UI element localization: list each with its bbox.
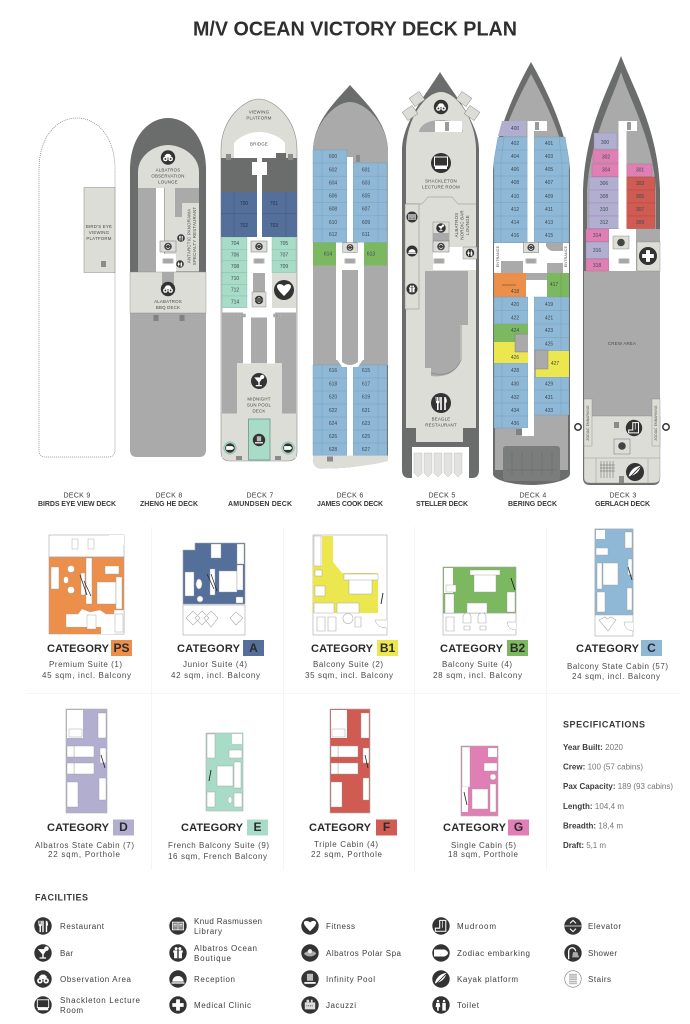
deck 6 plan: 617 xyxy=(362,382,370,388)
category C midship cabins xyxy=(494,297,569,428)
category B2: B2 xyxy=(510,641,525,655)
deck 4 plan: 434 xyxy=(511,408,519,414)
deck 4 plan: 425 xyxy=(545,342,553,348)
legend: toilet xyxy=(432,996,480,1014)
legend: library xyxy=(169,917,262,936)
deck 5 plan xyxy=(402,72,480,478)
legend: library: Library xyxy=(194,927,222,936)
deck labels: BIRDS EYE VIEW DECK xyxy=(38,501,116,508)
deck 4 plan: 419 xyxy=(545,302,553,308)
deck 8 plan xyxy=(130,118,206,457)
category E: E xyxy=(253,820,262,834)
deck 4 plan: 403 xyxy=(545,154,553,160)
category D cabin 400 xyxy=(498,121,526,136)
category A: CATEGORY xyxy=(177,643,241,655)
deck 6 plan: 611 xyxy=(362,232,370,238)
deck 9 plan xyxy=(39,118,115,457)
deck labels: DECK 9 xyxy=(63,492,91,500)
deck labels: ZHENG HE DECK xyxy=(140,501,198,508)
category A: 42 sqm, incl. Balcony xyxy=(171,671,260,680)
category E: French Balcony Suite (9) xyxy=(168,841,269,850)
specifications: Crew: 100 (57 cabins) xyxy=(563,762,643,772)
deck 8 plan: OBSERVATION xyxy=(151,174,185,178)
category A cabins: 701 xyxy=(270,201,278,207)
deck 4 plan xyxy=(493,62,570,485)
deck labels: AMUNDSEN DECK xyxy=(228,501,292,508)
deck 7 plan: 710 xyxy=(231,276,239,282)
icon: observation lounge xyxy=(161,150,175,165)
category PS: Premium Suite (1) xyxy=(49,660,122,669)
deck 7 plan: 708 xyxy=(231,264,239,270)
deck 6 plan: 612 xyxy=(329,232,337,238)
deck 6 plan: 604 xyxy=(329,180,337,186)
category C: 24 sqm, incl. Balcony xyxy=(572,672,660,681)
deck 3 plan: 312 xyxy=(600,220,608,226)
legend: medical clinic: Medical Clinic xyxy=(194,1001,251,1010)
deck 5 plan: NORDIC BAR xyxy=(460,210,464,240)
deck 4 plan: 405 xyxy=(545,167,553,173)
category PS xyxy=(42,535,132,680)
legend: medical clinic xyxy=(169,996,251,1014)
icon: infinity pool xyxy=(253,434,265,446)
deck 4 plan: 401 xyxy=(545,141,553,147)
specifications xyxy=(563,720,673,850)
floor plan E xyxy=(206,733,243,811)
deck 5 plan: ALBATROS xyxy=(454,213,459,237)
deck 5 plan: LOUNGE xyxy=(465,215,470,235)
category C xyxy=(567,529,668,681)
category A xyxy=(171,543,264,680)
deck 6 plan: 602 xyxy=(329,168,337,174)
category D cabins xyxy=(586,133,619,258)
legend: polar spa: Albatros Polar Spa xyxy=(326,949,402,958)
deck 3 plan xyxy=(575,56,669,485)
category G: G xyxy=(514,820,523,834)
legend: jacuzzi xyxy=(301,996,356,1014)
category A cabins xyxy=(221,192,297,237)
category C: C xyxy=(647,641,656,655)
legend: elevator xyxy=(564,917,621,935)
category F: F xyxy=(383,820,390,834)
deck 8 plan: LOUNGE xyxy=(158,180,178,184)
deck 7 plan: MIDNIGHT xyxy=(247,396,271,402)
deck 4 plan: 407 xyxy=(545,180,553,186)
deck 6 plan: 628 xyxy=(329,447,337,453)
facilities heading: FACILITIES xyxy=(35,892,88,902)
deck 4 plan: ENTRANCE xyxy=(496,245,500,267)
category B1: CATEGORY xyxy=(311,643,374,655)
deck 3 plan: 309 xyxy=(636,220,644,226)
legend: infinity pool: Infinity Pool xyxy=(326,975,375,984)
deck labels: DECK 8 xyxy=(155,492,183,500)
legend: jacuzzi: Jacuzzi xyxy=(326,1001,356,1010)
facilities legend xyxy=(34,892,621,1015)
icon: fitness xyxy=(274,280,294,300)
deck 5 plan: LECTURE ROOM xyxy=(422,184,460,190)
legend: elevator: Elevator xyxy=(588,922,621,931)
category B1: 35 sqm, incl. Balcony xyxy=(305,671,393,680)
deck 6 plan: 625 xyxy=(362,434,370,440)
deck 6 plan: 606 xyxy=(329,194,337,200)
deck 6 plan xyxy=(313,85,388,469)
deck 7 plan: 712 xyxy=(231,288,239,294)
deck 4 plan: 410 xyxy=(511,194,519,200)
category B2 cabin 417: 417 xyxy=(550,282,558,288)
deck 4 plan: 415 xyxy=(545,233,553,239)
deck 6 plan: 623 xyxy=(362,421,370,427)
legend: stairs: Stairs xyxy=(588,975,611,984)
deck 8 plan: ALBATROS xyxy=(156,168,180,172)
deck 3 plan: 306 xyxy=(600,181,608,187)
legend: boutique: Albatros Ocean xyxy=(194,944,257,953)
category C: CATEGORY xyxy=(576,643,640,655)
legend: mudroom: Mudroom xyxy=(457,922,496,931)
deck 3 plan: ZODIAC EMBARKING xyxy=(586,405,590,441)
legend: reception xyxy=(169,970,235,988)
category PS: 45 sqm, incl. Balcony xyxy=(42,671,131,680)
category B1: B1 xyxy=(380,641,395,655)
deck 5 plan: SHACKLETON xyxy=(425,178,457,184)
deck 6 plan: 621 xyxy=(362,408,370,414)
deck 4 plan: 423 xyxy=(545,328,553,334)
legend: polar spa xyxy=(301,944,402,962)
category B2: CATEGORY xyxy=(440,643,504,655)
category PS: CATEGORY xyxy=(47,643,110,655)
category A cabins: 702 xyxy=(240,223,248,229)
floor plan D xyxy=(66,709,107,813)
deck 6 plan: 619 xyxy=(362,394,370,400)
deck 4 plan: 436 xyxy=(511,421,519,427)
specifications: Pax Capacity: 189 (93 cabins) xyxy=(563,782,673,791)
category F cabins xyxy=(624,177,655,228)
deck 8 plan: BBQ DECK xyxy=(156,305,180,310)
legend: kayak platform: Kayak platform xyxy=(457,975,518,984)
category E xyxy=(168,733,269,861)
category PS cabin 418: 418 xyxy=(511,289,519,295)
icon: reception xyxy=(406,246,418,256)
deck 7 plan xyxy=(221,99,297,461)
deck 4 plan: 412 xyxy=(511,207,519,213)
deck labels: DECK 6 xyxy=(336,492,364,500)
deck 3 plan: 303 xyxy=(636,181,644,187)
category F: CATEGORY xyxy=(309,822,372,834)
legend: reception: Reception xyxy=(194,975,235,984)
deck 3 plan: 305 xyxy=(636,194,644,200)
deck 7 plan: BRIDGE xyxy=(250,142,268,146)
icon: lecture room xyxy=(431,153,451,173)
deck 7 plan: DECK xyxy=(252,408,266,414)
deck 6 plan: 626 xyxy=(329,434,337,440)
floor plan G xyxy=(461,746,498,816)
deck labels: DECK 3 xyxy=(609,492,637,500)
category D xyxy=(35,709,134,859)
deck 4 plan: 431 xyxy=(545,395,553,401)
legend: restaurant: Restaurant xyxy=(60,922,105,931)
category B2 cabins: 613 xyxy=(367,252,375,258)
deck 4 plan: 406 xyxy=(511,167,519,173)
legend: restaurant xyxy=(34,917,105,935)
icon: boutique xyxy=(406,284,418,294)
legend: boutique: Boutique xyxy=(194,954,232,963)
legend: lecture room xyxy=(34,996,141,1015)
specifications: Breadth: 18,4 m xyxy=(563,822,623,830)
deck 7 plan: PLATFORM xyxy=(246,116,272,120)
icon: kayak platform xyxy=(626,463,644,481)
deck 7 plan: 704 xyxy=(231,241,239,247)
deck 3 plan: 310 xyxy=(600,207,608,213)
deck 4 plan: 411 xyxy=(545,207,553,213)
floor plan F xyxy=(330,709,370,813)
deck 4 plan: ENTRANCE xyxy=(564,245,568,267)
category B2: Balcony Suite (4) xyxy=(442,660,512,669)
deck 7 plan: 714 xyxy=(231,300,239,306)
category B1: Balcony Suite (2) xyxy=(313,660,383,669)
category F: 22 sqm, Porthole xyxy=(311,850,383,859)
deck 3 plan: 308 xyxy=(600,194,608,200)
deck 6 plan: 603 xyxy=(362,180,370,186)
legend: zodiac embarking xyxy=(432,944,530,962)
category E: 16 sqm, French Balcony xyxy=(168,852,267,861)
category B2 cabins xyxy=(313,242,387,266)
deck 3 plan: 300 xyxy=(601,140,609,146)
category B1 cabin 426 xyxy=(494,342,528,363)
legend: fitness: Fitness xyxy=(326,922,355,931)
deck 6 plan: 601 xyxy=(362,168,370,174)
deck 3 plan: 304 xyxy=(602,168,610,174)
deck labels xyxy=(38,492,650,508)
deck 4 plan: 402 xyxy=(511,141,519,147)
deck labels: STELLER DECK xyxy=(416,501,468,508)
category C forward cabins xyxy=(494,137,569,242)
icon: medical clinic xyxy=(639,247,657,265)
deck 4 plan: 404 xyxy=(511,154,519,160)
deck 3 plan: CREW AREA xyxy=(608,341,636,346)
deck 4 plan: 416 xyxy=(511,233,519,239)
deck labels: JAMES COOK DECK xyxy=(317,501,383,508)
category C: Balcony State Cabin (57) xyxy=(567,662,668,671)
category A: A xyxy=(249,641,258,655)
category B1 cabin 427: 427 xyxy=(551,361,559,367)
deck 8 plan: ANTARCTIC PANORAMA xyxy=(186,209,192,263)
category F: Triple Cabin (4) xyxy=(314,840,378,849)
legend: shower: Shower xyxy=(588,949,617,958)
specifications: Draft: 5,1 m xyxy=(563,841,606,850)
floor plan PS xyxy=(49,535,124,634)
deck 8 plan: ALABATROS xyxy=(154,299,182,304)
category B1 cabin 426: 426 xyxy=(511,355,519,361)
icon: mudroom xyxy=(626,420,642,436)
floor plan B1 xyxy=(313,535,387,635)
deck 3 plan: 318 xyxy=(593,263,601,269)
category G cabins xyxy=(586,150,652,271)
deck labels: DECK 4 xyxy=(519,492,547,500)
deck 4 plan: 429 xyxy=(545,382,553,388)
deck 9 plan: VIEWING xyxy=(89,230,110,235)
legend: lecture room: Shackleton Lecture xyxy=(60,996,141,1005)
legend: lecture room: Room xyxy=(60,1006,83,1015)
category B2 cabin 424: 424 xyxy=(511,328,519,334)
category A: Junior Suite (4) xyxy=(183,660,247,669)
deck 7 plan: VIEWING xyxy=(249,110,270,114)
deck 4 plan: 433 xyxy=(545,408,553,414)
legend: fitness xyxy=(301,917,355,935)
deck 6 plan: 616 xyxy=(329,368,337,374)
legend: shower xyxy=(564,944,617,962)
deck 4 plan: 414 xyxy=(511,220,519,226)
deck 6 plan: 622 xyxy=(329,408,337,414)
deck 4 plan: 428 xyxy=(511,368,519,374)
deck 6 plan: 624 xyxy=(329,421,337,427)
deck 4 plan: 430 xyxy=(511,382,519,388)
legend: zodiac embarking: Zodiac embarking xyxy=(457,949,530,958)
deck 5 plan: BEAGLE xyxy=(432,416,450,422)
category C cabins xyxy=(313,150,387,456)
category E: CATEGORY xyxy=(181,822,244,834)
icon: library xyxy=(406,212,418,222)
category D: 22 sqm, Porthole xyxy=(48,850,121,859)
category B2 cabin 417 xyxy=(547,273,569,297)
specifications: SPECIFICATIONS xyxy=(563,720,645,730)
deck 6 plan: 600 xyxy=(329,154,337,160)
legend: kayak platform xyxy=(432,970,518,988)
icon: bar xyxy=(251,373,267,389)
deck 6 plan: 620 xyxy=(329,394,337,400)
deck 5 plan: RESTAURANT xyxy=(425,422,457,428)
category G xyxy=(443,746,529,859)
legend: observation area xyxy=(34,970,132,988)
deck 4 plan: 409 xyxy=(545,194,553,200)
category G: 18 sqm, Porthole xyxy=(448,850,519,859)
deck 6 plan: 605 xyxy=(362,194,370,200)
icon: BBQ deck xyxy=(161,282,175,296)
deck labels: DECK 7 xyxy=(246,492,274,500)
floor plan C xyxy=(595,529,633,636)
deck 3 plan: 301 xyxy=(636,168,644,174)
legend: stairs xyxy=(565,971,611,987)
legend: bar xyxy=(34,944,73,962)
deck 3 plan: 307 xyxy=(636,207,644,213)
specifications: Year Built: 2020 xyxy=(563,743,624,752)
category A cabins: 703 xyxy=(270,223,278,229)
deck 6 plan: 627 xyxy=(362,447,370,453)
deck 3 plan: 314 xyxy=(593,233,601,239)
legend: boutique xyxy=(169,944,257,963)
deck 3 plan: 316 xyxy=(593,248,601,254)
deck 4 plan: 413 xyxy=(545,220,553,226)
category E cabins xyxy=(222,238,296,308)
category D: D xyxy=(119,820,128,834)
deck 9 plan: BIRD'S EYE xyxy=(86,224,112,229)
deck 7 plan: 707 xyxy=(280,252,288,258)
deck labels: DECK 5 xyxy=(428,492,456,500)
legend: bar: Bar xyxy=(60,949,73,958)
icon: restaurant xyxy=(431,393,451,413)
category B2 cabin 424 xyxy=(494,324,528,342)
deck 6 plan: 608 xyxy=(329,206,337,212)
deck 7 plan: 705 xyxy=(280,241,288,247)
category G: CATEGORY xyxy=(443,822,507,834)
deck 6 plan: 618 xyxy=(329,382,337,388)
deck 3 plan: 302 xyxy=(602,154,610,160)
category B1 cabin 427 xyxy=(536,351,569,377)
deck 6 plan: 615 xyxy=(362,368,370,374)
deck 4 plan: 422 xyxy=(511,316,519,322)
category A cabins: 700 xyxy=(240,201,248,207)
floor plan A xyxy=(183,543,245,635)
deck 3 plan: ZODIAC EMBARKING xyxy=(654,405,658,441)
category PS cabin 418 xyxy=(494,273,526,297)
title: M/V OCEAN VICTORY DECK PLAN xyxy=(193,18,517,40)
legend: infinity pool xyxy=(301,970,375,988)
category B2 xyxy=(433,567,528,680)
deck 8 plan: SPECIALTY RESTAURANT xyxy=(192,207,197,265)
deck labels: BERING DECK xyxy=(508,501,557,508)
deck 7 plan: SUN POOL xyxy=(247,402,272,408)
category D: Albatros State Cabin (7) xyxy=(35,841,134,850)
deck 4 plan: 421 xyxy=(545,316,553,322)
deck 4 plan: 408 xyxy=(511,180,519,186)
category D: CATEGORY xyxy=(47,822,110,834)
category F xyxy=(309,709,397,859)
deck 9 plan: PLATFORM xyxy=(86,236,112,241)
category G: Single Cabin (5) xyxy=(451,841,516,850)
deck 4 plan: 420 xyxy=(511,302,519,308)
deck labels: GERLACH DECK xyxy=(595,501,650,508)
floor plan B2 xyxy=(443,567,516,635)
deck 6 plan: 610 xyxy=(329,220,337,226)
legend: toilet: Toilet xyxy=(457,1001,480,1010)
icon: observation xyxy=(434,100,448,114)
legend: mudroom xyxy=(432,917,496,935)
category B1 xyxy=(305,535,398,680)
deck 4 plan: 432 xyxy=(511,395,519,401)
specifications: Length: 104,4 m xyxy=(563,802,624,811)
legend: library: Knud Rasmussen xyxy=(194,917,262,926)
category D cabin 400: 400 xyxy=(511,126,519,132)
category PS: PS xyxy=(113,641,130,655)
category B2: 28 sqm, incl. Balcony xyxy=(433,671,522,680)
deck 7 plan: 709 xyxy=(280,264,288,270)
deck 6 plan: 607 xyxy=(362,206,370,212)
category B2 cabins: 614 xyxy=(324,252,332,258)
deck 7 plan: 706 xyxy=(231,252,239,258)
deck 6 plan: 609 xyxy=(362,220,370,226)
legend: observation area: Observation Area xyxy=(60,975,132,984)
